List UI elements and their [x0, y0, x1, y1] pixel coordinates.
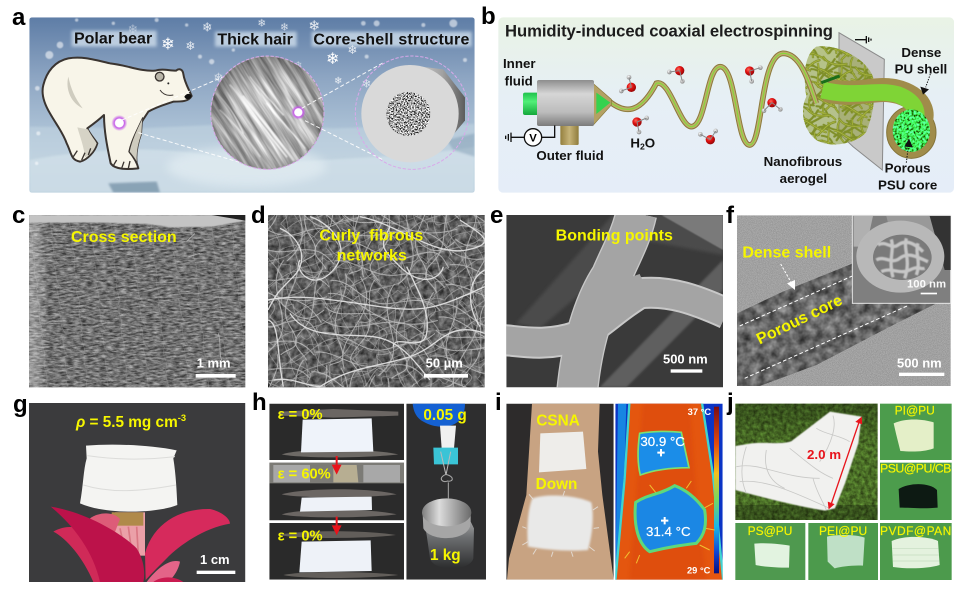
- red arrow 2: [333, 517, 340, 533]
- snowy background: ❄: [185, 39, 195, 53]
- label: Outer fluid: Outer fluid: [536, 148, 604, 163]
- snowy background: [29, 17, 475, 193]
- label: 37 C: 37 °C: [688, 407, 711, 417]
- label: Dense shell: Dense shell: [742, 245, 831, 262]
- fibre junction fill: [630, 274, 642, 282]
- panel g: aerogel on flower photo: [29, 403, 245, 582]
- panel f: TEM image with inset: [737, 215, 951, 387]
- sample: PSU@PU/CB: [880, 462, 952, 520]
- fibre: [737, 264, 936, 386]
- snowy background: ❄: [326, 51, 339, 68]
- polar bear: [43, 58, 192, 169]
- label: 31.4 C with crosshair: [646, 517, 691, 539]
- cold patch 2: [625, 481, 715, 563]
- title: Humidity-induced coaxial electrospinning: [505, 22, 833, 41]
- label: Inner fluid: Inner: [503, 56, 536, 71]
- arrow: 2.0 m: [828, 418, 862, 508]
- background: [737, 215, 951, 386]
- snowy background: ❄: [334, 76, 342, 87]
- snowy background: ❄: [280, 22, 289, 34]
- label: Cross section: Cross section: [71, 229, 177, 246]
- label: Nanofibrous aerogel: aerogel: [780, 171, 827, 186]
- white strip: [440, 426, 456, 448]
- spinning jet: [610, 53, 816, 145]
- scale bar: 1 cm: 1 cm: [200, 552, 230, 567]
- snowy background: ❄: [347, 43, 357, 57]
- panel h: compression and loading photos: [269, 404, 486, 580]
- CSNA patch: [539, 432, 586, 472]
- red arrow 1: [333, 456, 340, 472]
- label: 31.4 C with crosshair: 31.4 °C: [646, 524, 691, 539]
- label glows: [72, 31, 472, 47]
- strain labels: ε = 60%: [278, 467, 331, 483]
- scale bar: 50 um: [424, 356, 468, 378]
- label: density: -3: [178, 413, 186, 423]
- colour bar: [714, 407, 719, 573]
- label: Bonding points: Bonding points: [556, 228, 673, 245]
- dark background: [29, 403, 245, 582]
- panel b: coaxial electrospinning schematic: [498, 17, 954, 193]
- zoomed fibre with shell and core: [821, 76, 936, 158]
- snowy background: ❄: [362, 78, 371, 90]
- sample: PI@PU: [880, 403, 952, 460]
- label: Down: Down: [536, 476, 577, 493]
- circle: core-shell fibre: [355, 56, 469, 169]
- arrow: to shell: [920, 74, 930, 95]
- sample: PEI@PU: PEI@PU: [819, 524, 867, 538]
- label: 2.0 m: 2.0 m: [807, 447, 841, 462]
- snowy background: ❄: [294, 60, 302, 71]
- dashed zoom lines bear to hair: [122, 74, 243, 163]
- SEM texture and fibres: [268, 215, 485, 387]
- compression photo 3: [269, 523, 404, 580]
- cold patch 1: [638, 431, 689, 475]
- circle: thick hair: [210, 56, 324, 170]
- horizontal fibre: [503, 293, 726, 343]
- snowy background: ❄: [202, 20, 213, 34]
- label: Porous core: Porous core: [754, 292, 845, 348]
- SEM texture: [29, 215, 245, 387]
- sample: PVDF@PAN: [880, 523, 952, 580]
- outer fluid inlet: [560, 124, 579, 145]
- label: Polar bear: Polar bear: [74, 30, 152, 47]
- sample: PEI@PU: [808, 523, 878, 580]
- vertical fibre: [577, 213, 636, 390]
- panel letter b: b: [481, 3, 496, 30]
- snowy background: ❄: [213, 71, 223, 85]
- scale bar: 500 nm: 500 nm: [663, 351, 708, 366]
- thermal image: [615, 398, 724, 585]
- panel letter e: e: [490, 202, 503, 229]
- white aerogel cylinder: [80, 445, 177, 512]
- green inner fluid barrel: [523, 93, 539, 115]
- inset cross section: [852, 215, 951, 303]
- compression photo 2: [269, 463, 404, 520]
- snowy background: ❄: [308, 18, 320, 34]
- panel letter h: h: [252, 389, 267, 416]
- scale bar: 500 nm: 500 nm: [897, 355, 942, 370]
- dashed shell lines: [740, 276, 907, 378]
- scale bar: 1 cm: [197, 552, 235, 574]
- scale bar: 500 nm: [897, 355, 944, 376]
- sample: PS@PU: PS@PU: [748, 524, 792, 538]
- label: H2O: 2: [640, 142, 645, 152]
- background: [506, 215, 723, 387]
- petals: [51, 507, 230, 582]
- label: Dense PU shell: Dense: [901, 45, 941, 60]
- label: H2O: O: [645, 135, 655, 150]
- panel letter d: d: [251, 202, 266, 229]
- label: Core-shell structure: Core-shell structure: [313, 32, 469, 49]
- label: density: ρ = 5.5 mg cm: [76, 414, 178, 431]
- sample: PS@PU: [735, 523, 805, 580]
- spinneret body: [537, 80, 594, 126]
- panel letter a: a: [12, 4, 26, 31]
- label: CSNA: CSNA: [536, 413, 580, 430]
- snowy background: ❄: [161, 34, 175, 53]
- panel letter j: j: [726, 389, 734, 416]
- scale bar: 1 mm: [196, 356, 236, 378]
- blue glove: [413, 404, 465, 427]
- sample: PI@PU: PI@PU: [895, 403, 935, 417]
- weight: [422, 498, 474, 568]
- panel d: curly fibrous networks SEM: [268, 215, 485, 387]
- panel e: bonding points SEM: [503, 213, 726, 390]
- label: 30.9 C with crosshair: [640, 434, 685, 456]
- label: 29 C: 29 °C: [687, 566, 711, 576]
- binder clip: [433, 448, 458, 498]
- label: Curly fibrous networks: Curly fibrous: [319, 228, 423, 245]
- label: Porous PSU core: PSU core: [878, 177, 937, 192]
- panel c: cross section SEM: [20, 210, 245, 393]
- snowy background: ❄: [128, 22, 138, 36]
- scale bar: 100 nm: 100 nm: [907, 278, 946, 290]
- label: Curly fibrous networks: networks: [337, 248, 407, 265]
- arrow: to core: [904, 139, 913, 163]
- label: Dense PU shell: PU shell: [895, 61, 947, 76]
- nanofibrous aerogel cluster: [803, 46, 874, 144]
- nozzle cone: [593, 83, 611, 125]
- snowy background: ❄: [257, 18, 266, 30]
- label: 30.9 C with crosshair: 30.9 °C: [640, 434, 685, 449]
- collector plate: [839, 33, 884, 170]
- background: [498, 17, 954, 193]
- inner cone: [596, 93, 610, 114]
- arm photo: [506, 404, 614, 580]
- panel a: polar bear inspiration: [29, 17, 475, 193]
- label: Porous PSU core: Porous: [885, 161, 931, 176]
- panel letter c: c: [12, 202, 25, 229]
- grass photo with blanket: [735, 404, 878, 520]
- scale bar: 50 um: 50 µm: [426, 356, 463, 371]
- label: 1 kg: 1 kg: [430, 547, 461, 564]
- glow marker on hair: [291, 105, 306, 120]
- panel letter i: i: [495, 389, 502, 416]
- panel j: large sample and material variants: [735, 403, 952, 580]
- label: Nanofibrous aerogel: Nanofibrous: [764, 154, 842, 169]
- voltage source: V: [529, 132, 537, 144]
- panel letter f: f: [726, 202, 735, 229]
- sample: PSU@PU/CB: PSU@PU/CB: [880, 462, 951, 476]
- sample: PVDF@PAN: PVDF@PAN: [880, 524, 951, 538]
- label: Thick hair: Thick hair: [217, 32, 293, 49]
- scale bar: 1 mm: 1 mm: [197, 356, 231, 371]
- flower stamens: [112, 512, 145, 556]
- label: H2O: H: [630, 135, 640, 150]
- fibre outlines: [506, 215, 723, 359]
- strain labels: ε = 0%: [278, 528, 323, 544]
- arrow: dense shell: [781, 264, 795, 290]
- voltage source: [506, 125, 555, 146]
- down patch: [522, 491, 599, 557]
- water molecules: [619, 65, 783, 144]
- panel letter g: g: [13, 391, 28, 418]
- panel i: arm photo and thermal image: [506, 398, 724, 585]
- glow marker on bear: [111, 115, 127, 131]
- label: Inner fluid: fluid: [505, 73, 533, 88]
- label: 0.05 g: 0.05 g: [423, 407, 467, 424]
- compression photo 1: [269, 404, 404, 460]
- strain labels: [278, 407, 331, 544]
- loading photo: [406, 404, 486, 580]
- dashed zoom lines hair to fiber: [302, 63, 383, 160]
- strain labels: ε = 0%: [278, 407, 323, 423]
